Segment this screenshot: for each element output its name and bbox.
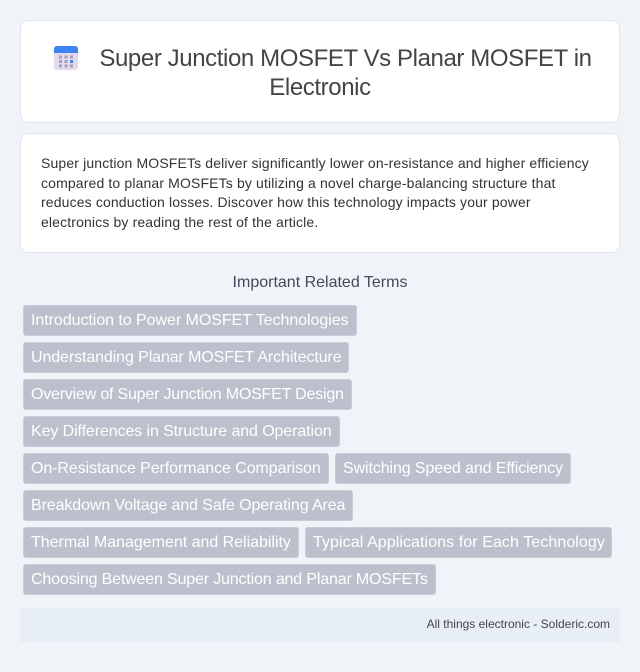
chip: typical applications: Typical Applications for Each Technology [313, 534, 605, 551]
footer: All things electronic - Solderic.com [427, 617, 610, 631]
chip: super junction design: Overview of Super Junction MOSFET Design [31, 386, 344, 403]
chip: breakdown voltage [23, 490, 353, 521]
panel: related term chips [23, 305, 612, 595]
panel: intro text [20, 133, 620, 253]
chip: thermal management [23, 527, 299, 558]
chip: super junction design [23, 379, 352, 410]
chip: key differences: Key Differences in Structure and Operation [31, 423, 332, 440]
footer [20, 608, 620, 642]
intro paragraph [41, 155, 589, 230]
title [99, 45, 592, 101]
chip: switching speed: Switching Speed and Efficiency [343, 460, 563, 477]
intro paragraph: Super junction MOSFETs deliver significantly lower on-resistance and higher efficiency [41, 155, 589, 171]
chip: breakdown voltage: Breakdown Voltage and Safe Operating Area [31, 497, 345, 514]
title: Electronic [269, 74, 371, 101]
chip: on-resistance [23, 453, 329, 484]
icon: calendar [54, 46, 78, 70]
heading: related terms: Important Related Terms [233, 274, 407, 291]
intro paragraph: compared to planar MOSFETs by utilizing a novel charge-balancing structure that [41, 175, 556, 191]
chip: choosing: Choosing Between Super Junction and Planar MOSFETs [31, 571, 428, 588]
chip: switching speed [335, 453, 571, 484]
chip: introduction [23, 305, 357, 336]
panel: title header [20, 20, 620, 123]
chip: planar architecture: Understanding Planar MOSFET Architecture [31, 349, 342, 366]
intro paragraph: reduces conduction losses. Discover how this technology impacts your power [41, 194, 531, 210]
intro paragraph: electronics by reading the rest of the article. [41, 214, 318, 230]
title: Super Junction MOSFET Vs Planar MOSFET in [99, 45, 592, 72]
chip: planar architecture [23, 342, 349, 373]
chip: thermal management: Thermal Management and Reliability [31, 534, 291, 551]
chip: introduction: Introduction to Power MOSFET Technologies [31, 312, 349, 329]
chip: choosing [23, 564, 436, 595]
chip: on-resistance: On-Resistance Performance Comparison [31, 460, 321, 477]
chip: key differences [23, 416, 340, 447]
chip: typical applications [305, 527, 612, 558]
